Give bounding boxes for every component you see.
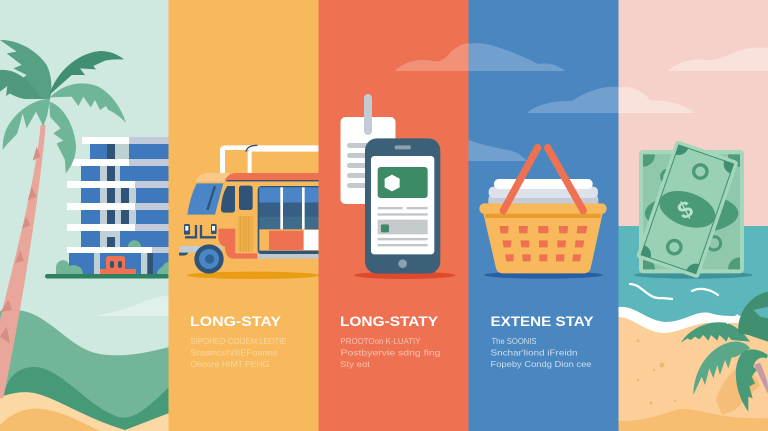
sea [618,226,768,322]
panel: beach and money [618,0,768,431]
body text [490,336,592,369]
body text: Onoore HIMT PEHG [190,359,270,369]
panel: booking [318,0,565,431]
body text: Sty eot [340,359,371,369]
heading: EXTENE STAY [490,313,594,329]
sand and foam [618,307,768,431]
basket icon [479,148,607,279]
receipt with clip [340,94,396,204]
body text [190,338,286,367]
body text: Snchar'liond iFreidn [490,348,578,358]
palm tree [0,40,126,398]
body text: The SOONIS [492,336,537,346]
cloud [96,296,169,316]
cloud [395,41,565,71]
bus icon [179,145,320,279]
hills [0,310,169,431]
clouds [618,47,768,113]
hotel building [45,137,169,278]
body text: PROOTOon K-LUATIY [340,336,421,346]
panel: shopping [468,0,618,431]
dollar sign: $ [673,195,698,225]
panel: transport [168,0,320,431]
panel: beach and hotel [0,0,169,431]
body text: SrasincsIVIIEFoanns [190,348,278,358]
body text: Postbyervie sdng fing [340,348,441,358]
body text: SIPOHED COOEM LEDTIE [190,336,287,346]
heading: LONG-STAY [190,313,282,329]
money icon [634,140,753,279]
frond [0,40,51,99]
sand [0,392,169,431]
body text: Fopeby Condg Dion cee [490,359,592,369]
phone icon [354,138,455,279]
small palm [681,292,768,412]
heading: LONG-STATY [340,313,439,329]
wave lines [630,284,718,299]
sand specks [636,340,676,404]
body text [340,336,441,369]
clouds [468,43,618,161]
